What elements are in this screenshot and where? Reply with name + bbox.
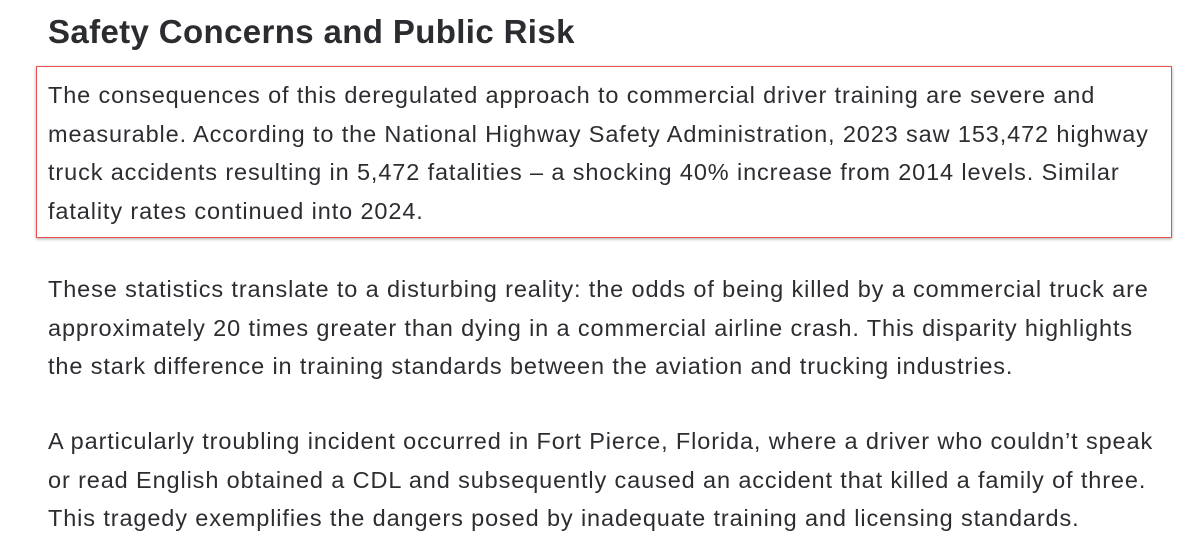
text block: paragraph 1: measurable. According to the National Highway Safety Administration, 2023 saw 153,472 highway xyxy=(48,120,1149,146)
callout box: highlighted paragraph xyxy=(36,66,1172,238)
text block: paragraph 3: or read English obtained a CDL and subsequently caused an accident that killed a family of three. xyxy=(48,466,1146,492)
text block: paragraph 1: The consequences of this deregulated approach to commercial driver training are severe and xyxy=(48,82,1095,108)
text block: paragraph 3: A particularly troubling incident occurred in Fort Pierce, Florida, where a driver who couldn’t speak xyxy=(48,428,1153,454)
text block: paragraph 1: truck accidents resulting in 5,472 fatalities – a shocking 40% increase from 2014 levels. Similar xyxy=(48,159,1120,185)
text block: paragraph 3: This tragedy exemplifies the dangers posed by inadequate training and licensing standards. xyxy=(48,505,1080,531)
text block: paragraph 2: the stark difference in training standards between the aviation and trucking industries. xyxy=(48,353,1013,379)
text block: paragraph 1: fatality rates continued into 2024. xyxy=(48,198,424,224)
text block: paragraph 3 xyxy=(48,428,1153,531)
text block: paragraph 2: These statistics translate to a disturbing reality: the odds of being killed by a commercial truck are xyxy=(48,276,1149,302)
text block: paragraph 1 xyxy=(48,82,1149,224)
title: Safety Concerns and Public Risk xyxy=(48,13,575,50)
text block: paragraph 2: approximately 20 times greater than dying in a commercial airline crash. This disparity highlights xyxy=(48,314,1133,340)
text block: paragraph 2 xyxy=(48,276,1149,379)
